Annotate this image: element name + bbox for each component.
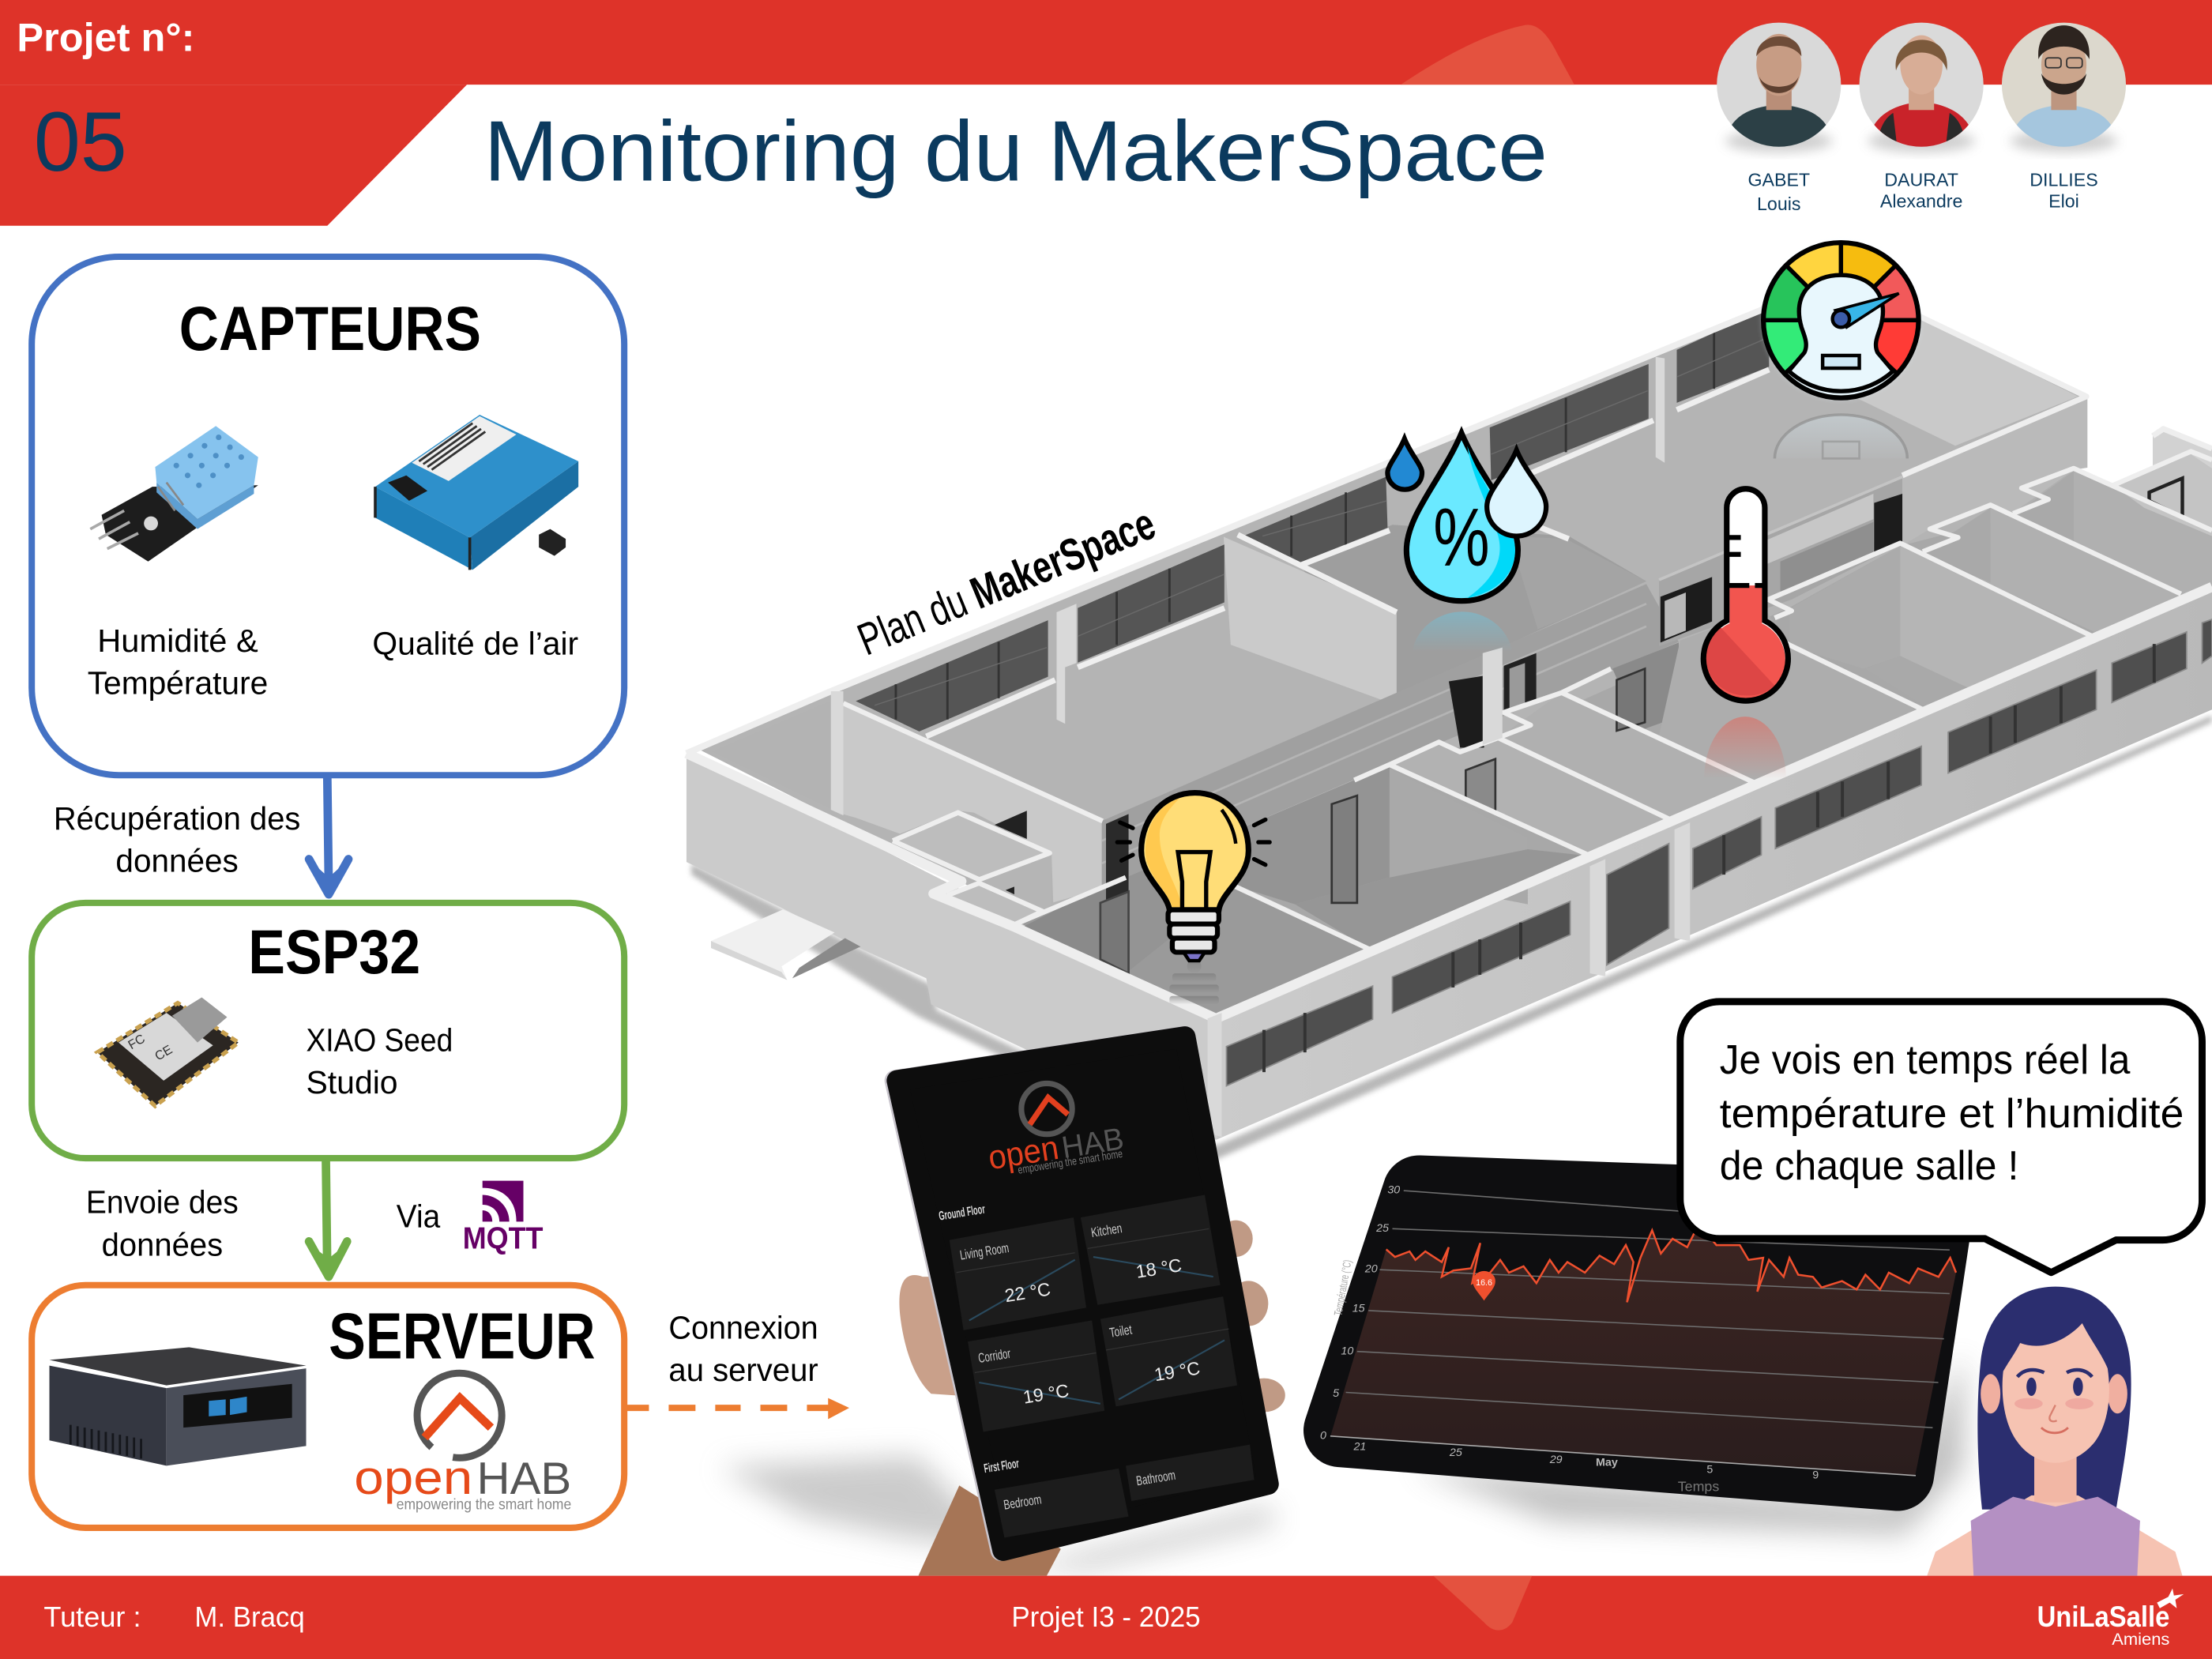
interior base: [702, 278, 2212, 1016]
right hall light wall: [1763, 278, 2078, 446]
y axis labels: 0: [1320, 1429, 1326, 1442]
axis title: temps: Temps: [1678, 1479, 1719, 1495]
gauge reflection: [1774, 415, 1907, 458]
card: toilet: [1100, 1296, 1237, 1406]
room two: [1390, 769, 1528, 905]
y axis labels: 10: [1341, 1345, 1353, 1357]
logo: MQTT: [463, 1181, 544, 1255]
icon: humidity drops: [1387, 433, 1546, 652]
footer: tuteur: Tuteur :: [43, 1601, 141, 1633]
icon: XIAO board: CE: [152, 1042, 175, 1063]
icon: mini PC: [49, 1347, 307, 1465]
panel: serveur: [32, 1285, 624, 1528]
logo: MQTT: MQTT: [463, 1221, 544, 1255]
y axis labels: 25: [1375, 1222, 1389, 1235]
y axis labels: 30: [1387, 1184, 1400, 1197]
back wall windows: [856, 307, 1769, 732]
team names: Eloi: [2048, 191, 2079, 212]
logo: UniLaSalle: [2037, 1589, 2184, 1649]
portrait: Gabet: [1714, 20, 1844, 149]
label: récupération: données: [115, 843, 239, 879]
icon: XIAO board: [97, 997, 239, 1106]
header band: [0, 0, 2212, 226]
sensor labels: Humidité &: [97, 623, 258, 659]
card: bathroom: [1126, 1445, 1255, 1501]
icon: humidity drops: %: [1433, 491, 1490, 583]
x axis labels: [1352, 1441, 1819, 1481]
sensor labels: Température: [88, 665, 268, 702]
sensor labels: [88, 623, 578, 702]
portrait: Daurat: [1856, 20, 1986, 149]
label: récupération: [54, 800, 300, 879]
chart tablet shadow: [1411, 1354, 1964, 1535]
logo: openHAB: [354, 1373, 571, 1514]
drops reflection: [1413, 611, 1512, 652]
right rooms: [1924, 508, 1991, 583]
hand holding tablet: [899, 1221, 1285, 1576]
data pin: [1473, 1271, 1495, 1300]
temperature chart tablet: [1320, 1184, 1975, 1495]
front windows: [1226, 619, 2212, 1085]
partition wall: [1224, 536, 1397, 705]
bubble text: [1720, 1036, 2184, 1188]
title: Monitoring du MakerSpace: [483, 103, 1548, 200]
tablet shadows: [720, 1456, 1277, 1569]
heading: capteurs: CAPTEURS: [179, 294, 481, 363]
logo: openHAB: empowering the smart home: [397, 1496, 571, 1514]
label: connexion: au serveur: [668, 1352, 818, 1388]
logo: UniLaSalle: Amiens: [2112, 1630, 2169, 1649]
bubble text: de chaque salle !: [1720, 1142, 2018, 1188]
bulb reflection: [1169, 959, 1219, 1004]
label: envoie: Envoie des: [86, 1184, 239, 1221]
arrow: serveur to tablet: [626, 1398, 849, 1419]
footer: tuteur: M. Bracq: [194, 1601, 305, 1633]
sensor labels: Qualité de l’air: [372, 626, 578, 662]
portrait: Dillies: [1999, 20, 2129, 149]
character: woman: [1927, 1287, 2182, 1576]
icon: PMS air quality sensor: [375, 415, 578, 570]
card: bathroom: Bathroom: [1135, 1468, 1176, 1488]
left exterior wall: [687, 750, 1216, 1140]
window sills: [926, 370, 1769, 736]
label: envoie: [86, 1184, 239, 1262]
small rooms: [893, 813, 1050, 879]
x axis labels: May: [1596, 1456, 1618, 1469]
card: toilet: 19 °C: [1153, 1357, 1202, 1385]
label: via: Via: [397, 1198, 440, 1235]
openHAB logo on tablet: empowering the smart home: [1017, 1148, 1123, 1177]
logo: UniLaSalle: UniLaSalle: [2037, 1600, 2169, 1633]
team names: Alexandre: [1880, 191, 1962, 212]
card: kitchen: [1081, 1194, 1221, 1305]
plan label: Plan du MakerSpace: [851, 498, 1162, 665]
icon: gauge: [1762, 241, 1920, 458]
wall tops: [687, 278, 2212, 1018]
left room: [712, 701, 831, 809]
card: corridor: Corridor: [977, 1346, 1012, 1366]
x axis labels: 29: [1549, 1454, 1563, 1466]
icon: DHT sensor: [90, 426, 258, 562]
label: envoie: données: [102, 1226, 223, 1262]
team names: DAURAT: [1884, 170, 1958, 190]
team portraits: [1714, 20, 2129, 152]
team names: DILLIES: [2030, 170, 2098, 190]
pilasters: [831, 357, 1690, 1137]
label: connexion: Connexion: [668, 1310, 818, 1346]
y axis labels: 20: [1364, 1263, 1378, 1276]
openHAB logo on tablet: [986, 1083, 1126, 1177]
mid rooms: [1498, 693, 1755, 820]
card: corridor: 19 °C: [1021, 1380, 1070, 1408]
x axis labels: 25: [1449, 1446, 1462, 1459]
card: kitchen: 18 °C: [1134, 1255, 1183, 1282]
stairs: [711, 909, 860, 980]
icon: thermometer: [1703, 489, 1788, 779]
card: living room: [950, 1217, 1086, 1330]
openHAB logo on tablet: open: [986, 1129, 1061, 1177]
x axis labels: 21: [1352, 1441, 1366, 1454]
arrow: capteurs to esp32: [309, 776, 348, 897]
thermometer room: [1659, 609, 1924, 783]
logo: openHAB: HAB: [477, 1454, 571, 1504]
right hall exterior wall: [1902, 397, 2087, 546]
window frames: [896, 333, 1714, 720]
arrow: esp32 to serveur: [309, 1160, 347, 1281]
panel: capteurs: [32, 257, 624, 775]
y axis labels: 5: [1333, 1387, 1339, 1400]
footer: project: Projet I3 - 2025: [1011, 1601, 1201, 1633]
bulb room: [1019, 878, 1370, 1016]
team names: [1747, 170, 2098, 214]
card: living room: Living Room: [959, 1240, 1010, 1263]
board label: XIAO Seed: [307, 1021, 453, 1058]
label: récupération: Récupération des: [54, 800, 300, 837]
board label: Studio: [307, 1064, 398, 1100]
card: corridor: [968, 1320, 1104, 1431]
speech bubble: [1680, 1002, 2203, 1273]
card: bedroom: [995, 1469, 1129, 1537]
x axis labels: 5: [1706, 1463, 1713, 1476]
footer band: [0, 1576, 2212, 1659]
thermometer reflection: [1704, 717, 1786, 779]
panel: esp32: [32, 903, 624, 1158]
footer: tuteur: [43, 1601, 305, 1633]
axis title: temperature: Température (°C): [1332, 1259, 1355, 1317]
team names: Louis: [1757, 194, 1801, 214]
project number: 05: [34, 94, 127, 189]
chart area: [1330, 1224, 1956, 1476]
heading: serveur: SERVEUR: [329, 1301, 596, 1373]
heading: esp32: ESP32: [248, 917, 420, 987]
room behind humidity icon: [1300, 525, 1646, 695]
wall panel: [844, 703, 1103, 902]
bubble text: Je vois en temps réel la: [1720, 1036, 2131, 1082]
section: ground floor: Ground Floor: [938, 1202, 986, 1224]
corridor glass wall: [1102, 584, 1679, 903]
data pin: 16.6: [1476, 1278, 1492, 1288]
logo: openHAB: open: [354, 1450, 472, 1504]
y axis labels: 15: [1352, 1303, 1365, 1315]
team names: GABET: [1747, 170, 1810, 190]
grid lines: [1330, 1191, 1975, 1476]
board label: [307, 1021, 453, 1100]
icon: XIAO board: FC: [126, 1032, 148, 1052]
project label: Projet n°:: [17, 15, 194, 59]
card: toilet: Toilet: [1108, 1322, 1133, 1341]
icon: light bulb: [1117, 793, 1270, 1004]
card: bedroom: Bedroom: [1003, 1492, 1043, 1513]
card: living room: 22 °C: [1003, 1278, 1052, 1306]
card: kitchen: Kitchen: [1090, 1221, 1123, 1240]
y axis labels: [1320, 1184, 1400, 1442]
front exterior wall: [1216, 587, 2212, 1140]
label: connexion: [668, 1310, 818, 1388]
section: first floor: First Floor: [983, 1456, 1020, 1476]
building floor plan: [687, 278, 2212, 1160]
x axis labels: 9: [1812, 1469, 1819, 1481]
bubble text: température et l’humidité: [1720, 1090, 2184, 1136]
temperature line: [1386, 1224, 1956, 1302]
doors: [1449, 675, 1484, 747]
openHAB logo on tablet: HAB: [1059, 1121, 1126, 1165]
lower zone base: [1023, 465, 2212, 1016]
large room walls: [1789, 546, 1900, 668]
tablet with dashboard: [895, 1036, 1285, 1576]
